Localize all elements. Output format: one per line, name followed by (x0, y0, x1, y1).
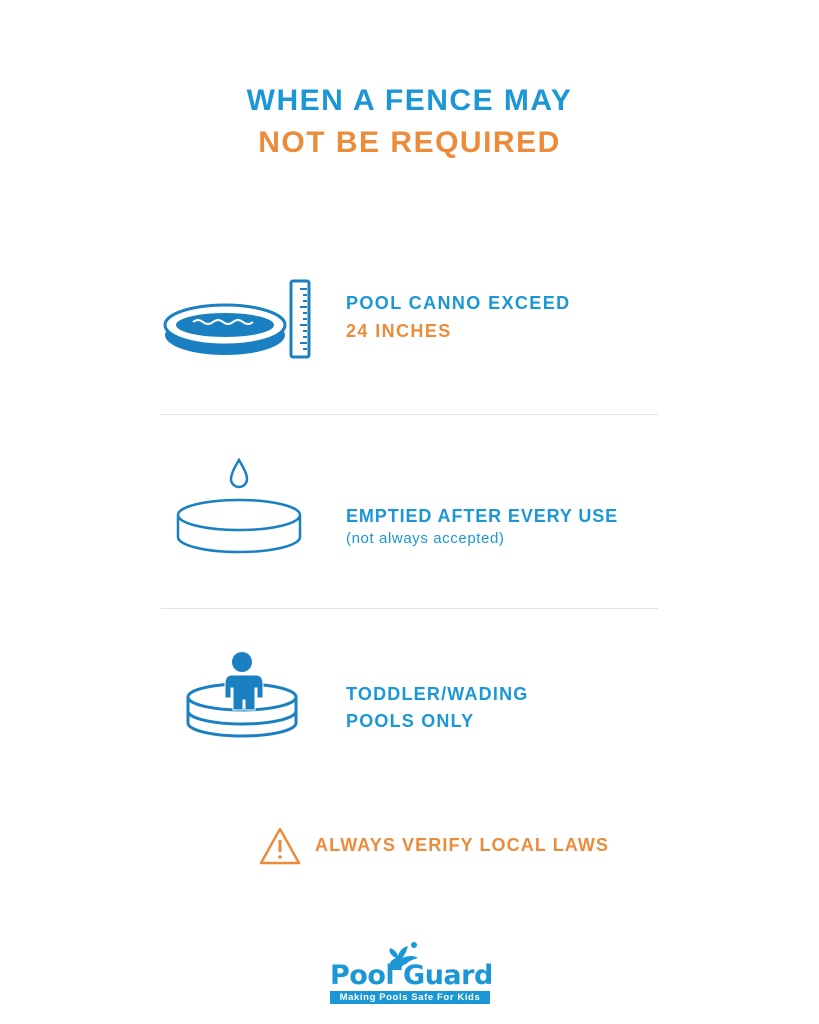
icon: splash (390, 942, 418, 970)
text: toddler/wading pools only: TODDLER/WADING (346, 684, 528, 704)
callout: always verify local laws: ALWAYS VERIFY LOCAL LAWS (315, 835, 609, 855)
callout: always verify local laws (260, 828, 609, 864)
title (246, 84, 572, 159)
text: pool canno exceed: 24 INCHES (346, 321, 452, 341)
text: emptied after every use: EMPTIED AFTER EVERY USE (346, 506, 618, 526)
icon: water drop and empty pool (176, 458, 302, 554)
icon: warning triangle (260, 828, 300, 864)
text: emptied after every use: (not always accepted) (346, 530, 505, 547)
title: WHEN A FENCE MAY (247, 84, 572, 117)
text: emptied after every use (346, 506, 618, 547)
text: pool canno exceed (346, 293, 570, 341)
icon: pool with ruler (164, 280, 310, 358)
text: toddler/wading pools only (346, 684, 528, 731)
icon: toddler in wading pool (186, 652, 298, 738)
title: NOT BE REQUIRED (258, 126, 561, 159)
text: toddler/wading pools only: POOLS ONLY (346, 711, 474, 731)
logo: Pool Guard (330, 942, 493, 1004)
logo: Pool Guard: Making Pools Safe For Kids (340, 992, 480, 1003)
logo: Pool Guard: Pool Guard (330, 960, 493, 991)
text: pool canno exceed: POOL CANNO EXCEED (346, 293, 570, 313)
